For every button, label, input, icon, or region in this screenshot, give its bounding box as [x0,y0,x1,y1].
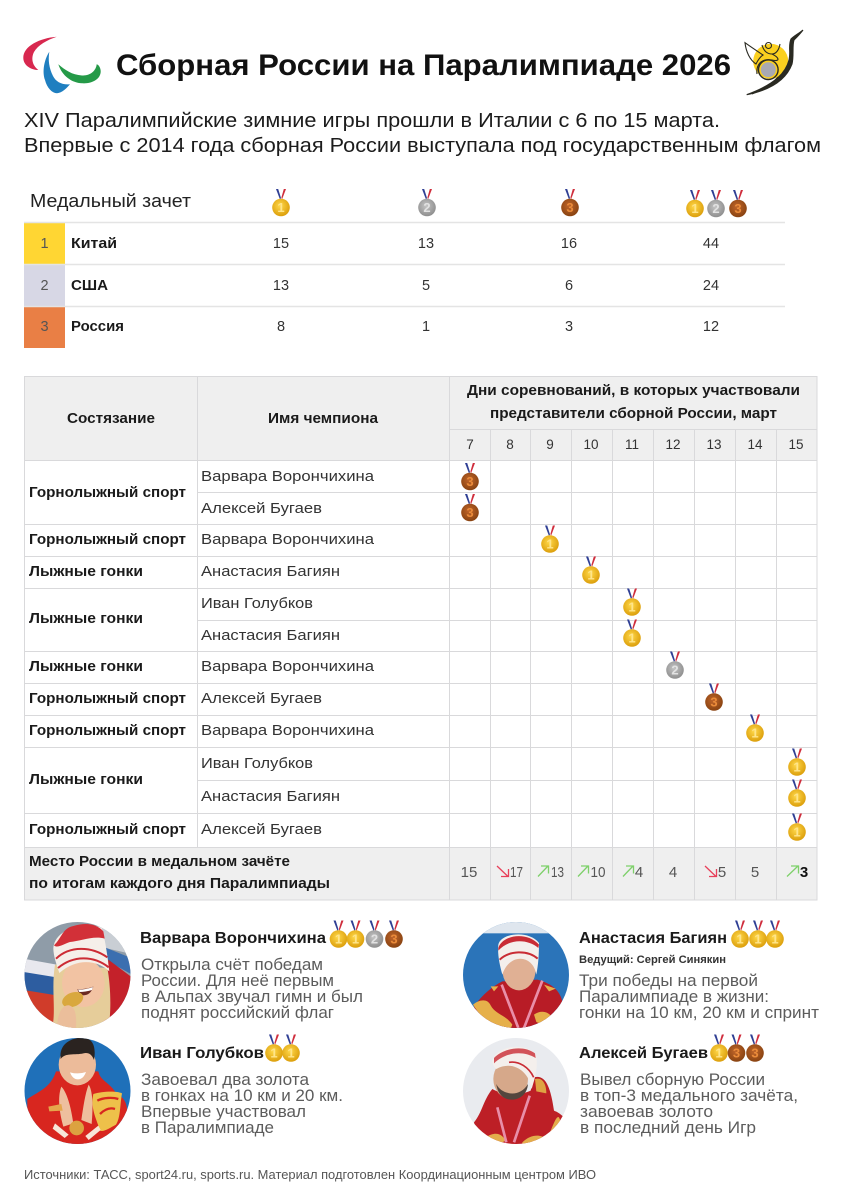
medals by day: 1 [793,790,801,806]
row: Russia's place by day: 13 [551,864,564,881]
medals: 1 [352,932,359,946]
row: Russia's place by day [29,854,808,892]
description: Паралимпиаде в жизни: [579,988,769,1006]
medals by day: 2 [671,662,679,678]
name: Иван Голубков [140,1045,264,1062]
medals by day: 1 [546,536,554,552]
description: в Паралимпиаде [141,1119,274,1137]
row: China: 16 [561,236,577,252]
row: China: 44 [703,236,719,252]
medals by day: 3 [466,474,474,489]
photo: Anastasia Bagiyan [463,922,569,1028]
medals: 1 [335,932,342,946]
row: China: 1 [40,236,49,252]
row: China [40,236,719,252]
medals [265,1034,300,1062]
medals by day [461,463,806,841]
medals: 3 [733,1046,740,1060]
description: России. Для неё первым [141,972,334,990]
row: Russia's place by day: 5 [718,864,726,881]
source note: Источники: ТАСС, sport24.ru, sports.ru. Материал подготовлен Координационным центром ИВО [24,1168,596,1182]
medals by day: 1 [587,568,595,582]
row: Russia: Россия [71,319,124,335]
panel: Anastasia Bagiyan [459,918,819,1033]
column: competitions: Лыжные гонки [29,772,143,788]
column: champion names [201,469,375,838]
column: champion names: Варвара Ворончихина [201,659,375,675]
description: в Альпах звучал гимн и был [141,988,363,1006]
icon: IVO bird emblem [745,30,803,95]
subtitle: XIV Паралимпийские зимние игры прошли в Италии с 6 по 15 марта. [24,109,720,132]
table header: 10 [583,437,599,452]
icon: Paralympic agitos logo [23,37,101,93]
panel: Ivan Golubkov [20,1034,343,1149]
medals by day: 3 [710,694,718,710]
photo: Aleksey Bugaev [463,1038,569,1144]
row: USA [40,278,719,294]
table header: 15 [788,437,804,452]
description: в последний день Игр [580,1119,756,1137]
row: USA: 2 [40,278,49,294]
row: USA: 5 [422,278,430,294]
table header: Дни соревнований, в которых участвовали [467,383,800,399]
row: USA: 24 [703,278,719,294]
medals by day: 1 [628,630,636,646]
medal column icons: 3 [566,200,574,215]
medals by day: 1 [628,600,636,614]
column: competitions: Горнолыжный спорт [29,485,186,501]
table header: 7 [466,437,474,452]
description: Открыла счёт победам [141,956,323,974]
column: champion names: Иван Голубков [201,756,313,772]
row: Russia's place by day: 4 [635,864,643,881]
row: Russia's place by day: 5 [751,864,759,881]
medals by day: 1 [793,824,801,840]
description: завоевав золото [580,1103,713,1121]
medals: 2 [371,932,378,946]
description: гонки на 10 км, 20 км и спринт [579,1004,819,1022]
description: Завоевал два золота [141,1071,310,1089]
column: competitions: Горнолыжный спорт [29,723,186,739]
name: Алексей Бугаев [579,1045,708,1062]
panel: Aleksey Bugaev [459,1034,798,1149]
row: Russia's place by day: 17 [510,864,523,881]
heading: medal standings: Медальный зачет [30,191,191,211]
table header: 14 [747,437,763,452]
medals [330,920,403,948]
rank colour cells [24,223,65,348]
medals: 1 [287,1046,295,1060]
presenter note: Ведущий: Сергей Синякин [579,954,726,966]
panel: champions schedule table [24,376,817,900]
medals: 1 [771,932,779,946]
row: USA: 13 [273,278,289,294]
medals by day: 1 [793,760,801,774]
row: Russia's place by day: 3 [800,864,808,881]
column: competitions: Горнолыжный спорт [29,691,186,707]
medals: 3 [390,932,398,946]
column: champion names: Варвара Ворончихина [201,532,375,548]
row: Russia's place by day: 15 [461,864,477,881]
description [141,956,363,1022]
row: China: Китай [71,236,117,252]
medals: 1 [736,932,744,946]
row: China: 15 [273,236,289,252]
photo: Ivan Golubkov [24,1038,130,1144]
table header: 11 [625,437,639,452]
row: Russia: 3 [565,319,573,335]
row: Russia: 3 [40,319,49,335]
panel: medal standings table [24,189,785,348]
description: в топ-3 медального зачёта, [580,1087,798,1105]
row: Russia's place by day: Место России в медальном зачёте [29,854,290,870]
name: Анастасия Багиян [579,930,727,947]
medal column icons: 1 [691,201,699,216]
medal column icons: 1 [277,200,285,215]
row: Russia [40,319,719,335]
row: Russia's place by day: 10 [590,864,606,881]
table header: 13 [706,437,722,452]
column: champion names: Алексей Бугаев [201,691,322,707]
medal column icons [272,189,747,217]
medal column icons: 2 [712,201,720,216]
panel: Varvara Voronchikhina [20,918,403,1033]
column: champion names: Варвара Ворончихина [201,723,375,739]
medals [710,1034,764,1062]
column: champion names: Иван Голубков [201,596,313,612]
description [141,1071,343,1137]
column: champion names: Алексей Бугаев [201,501,322,517]
row: Russia's place by day: по итогам каждого дня Паралимпиады [29,876,330,892]
medals: 1 [715,1046,723,1060]
description: поднят российский флаг [141,1004,334,1022]
row: Russia: 12 [703,319,719,335]
medals: 1 [270,1046,278,1060]
column: champion names: Анастасия Багиян [201,789,340,805]
table header: 12 [665,437,681,452]
column: champion names: Алексей Бугаев [201,822,322,838]
medals by day: 3 [466,505,474,520]
description [580,1071,798,1137]
medal column icons: 2 [423,200,431,215]
arrows: down in red, up in green [497,866,798,876]
medals: 3 [751,1046,759,1060]
column: competitions: Лыжные гонки [29,611,143,627]
medals: 1 [754,932,762,946]
description: в гонках на 10 км и 20 км. [141,1087,343,1105]
description: Три победы на первой [579,972,758,990]
description: Впервые участвовал [141,1103,306,1121]
column: competitions [29,485,186,838]
name: Варвара Ворончихина [140,930,326,947]
medal column icons: 3 [734,201,742,216]
title: Сборная России на Паралимпиаде 2026 [116,49,731,82]
row: Russia: 8 [277,319,285,335]
table header [67,383,804,452]
column: champion names: Анастасия Багиян [201,564,340,580]
column: competitions: Лыжные гонки [29,564,143,580]
row: USA: США [71,278,109,294]
table header: Имя чемпиона [268,411,379,427]
description: Вывел сборную России [580,1071,765,1089]
column: competitions: Лыжные гонки [29,659,143,675]
description [579,972,819,1022]
row: USA: 6 [565,278,573,294]
column: champion names: Варвара Ворончихина [201,469,375,485]
table header: представители сборной России, март [490,406,777,422]
column: competitions: Горнолыжный спорт [29,532,186,548]
subtitle: Впервые с 2014 года сборная России выступала под государственным флагом [24,134,821,157]
subtitle [24,109,821,157]
row: Russia's place by day: 4 [669,864,677,881]
row: Russia: 1 [422,319,430,335]
table header: 8 [506,437,514,452]
table header: 9 [546,437,554,452]
medals [731,920,784,948]
photo: Varvara Voronchikhina [24,922,130,1028]
table header: Состязание [67,411,155,427]
column: champion names: Анастасия Багиян [201,628,340,644]
column: competitions: Горнолыжный спорт [29,822,186,838]
row: China: 13 [418,236,434,252]
medals by day: 1 [751,726,759,740]
